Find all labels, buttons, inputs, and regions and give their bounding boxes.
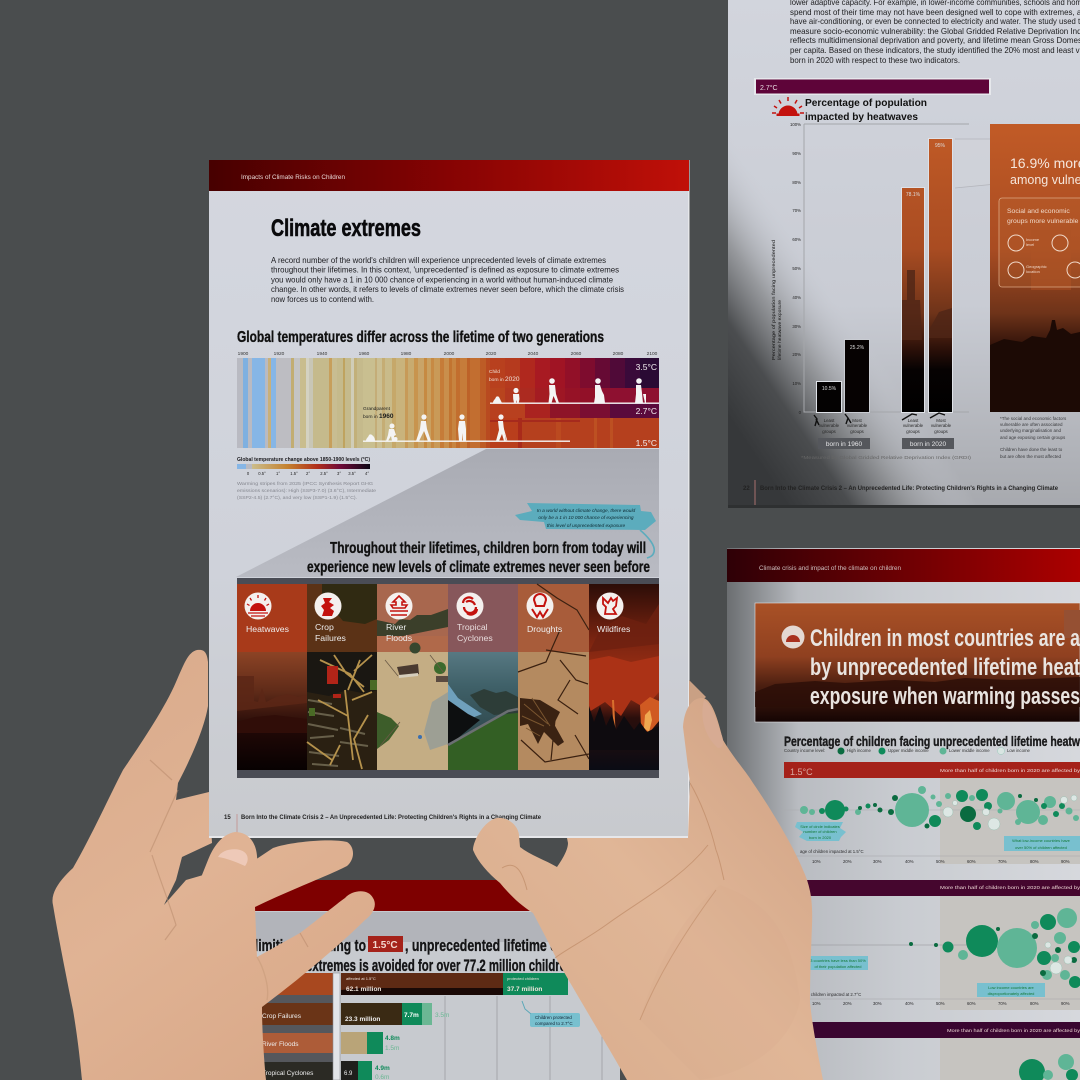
- bar chart: population impacted: groups: [906, 429, 921, 434]
- page footer 15: 15: [224, 815, 231, 821]
- bar chart: children protected: 3.5m: [435, 1012, 449, 1019]
- legend: income level: Country income level:: [784, 748, 825, 753]
- note: bubble annotation: born in 2020: [809, 835, 832, 840]
- legend: temperature scale: 3.5°: [348, 471, 356, 476]
- chart heading: [805, 97, 927, 123]
- chart panel 1.5C: 90%: [1061, 859, 1070, 864]
- grandparent lifeline with silhouettes: [363, 414, 570, 442]
- legend: income level: [784, 748, 1031, 754]
- scenario bar 2.7C: 2.7°C: [760, 84, 778, 92]
- header band: [727, 549, 1080, 582]
- chart panel 2.7C: 60%: [967, 1001, 976, 1006]
- bar chart: population impacted: Percentage of population facing unprecedented: [771, 239, 776, 360]
- bar chart: population impacted: groups: [934, 429, 949, 434]
- headline with 1.5C tag: extremes is avoided for over 77.2 million children: [306, 956, 573, 975]
- note: low income annotation: Low income countries are: [988, 985, 1035, 990]
- legend: temperature scale: Global temperature change above 1850-1900 levels (°C): [237, 457, 370, 463]
- callout text: [1010, 155, 1080, 187]
- year axis: 2060: [571, 351, 582, 357]
- column: crop failures: [307, 584, 377, 770]
- column: droughts: Droughts: [527, 624, 563, 634]
- legend: temperature scale: 0: [247, 471, 250, 476]
- year axis: 2020: [486, 351, 497, 357]
- bar chart: population impacted: groups: [850, 429, 865, 434]
- year axis: [238, 351, 658, 357]
- year axis: 1920: [274, 351, 285, 357]
- legend: temperature scale: 0.5°: [258, 471, 266, 476]
- bar chart: population impacted: 0: [799, 410, 802, 415]
- column: heatwaves: [237, 584, 307, 770]
- chart panel 1.5C: 40%: [905, 859, 914, 864]
- column: crop failures: Crop: [315, 622, 334, 632]
- note: low income annotation: disproportionately affected: [988, 991, 1034, 996]
- bar chart: population impacted: [771, 122, 996, 460]
- bar chart: population impacted: vulnerable: [847, 423, 868, 428]
- year axis: 2040: [528, 351, 539, 357]
- bar chart: children protected: Tropical Cyclones: [262, 1070, 314, 1077]
- bar chart: children protected: affected at 1.5°C: [346, 976, 376, 981]
- note: children protected: compared to 2.7°C: [535, 1021, 573, 1026]
- bar chart: population impacted: 100%: [790, 122, 801, 127]
- panel: right lower report page: [727, 548, 1080, 1080]
- column: wildfires: Wildfires: [597, 624, 631, 634]
- intro text: throughout their lifetimes. In this context, 'unprecedented' is defined as exposure to climate extremes: [271, 266, 619, 274]
- headline: new levels of extremes: [307, 540, 650, 576]
- headline with 1.5C tag: [232, 936, 605, 975]
- headline with 1.5C tag: For limiting warming to: [232, 936, 366, 955]
- callout box: Income: [1026, 237, 1040, 242]
- note: children protected: Children protected: [535, 1015, 572, 1020]
- chart panel 2.7C: More than half of children born in 2020 are affected by: [940, 885, 1080, 890]
- year axis: 1940: [317, 351, 328, 357]
- bar chart: children protected: 6.9: [344, 1071, 353, 1077]
- header band: Impacts of Climate Risks on Children: [241, 175, 345, 181]
- bar chart: children protected: 62.1 million: [346, 986, 381, 993]
- page footer 15: [224, 814, 542, 836]
- bar chart: population impacted: *Measured by Global Gridded Relative Deprivation Index (GRDI): [801, 455, 972, 460]
- bar chart: population impacted: groups: [822, 429, 837, 434]
- header band: [209, 160, 689, 191]
- labels: Child: [489, 369, 500, 375]
- panel: orange statistic panel: [990, 124, 1080, 412]
- page footer 22: 22: [743, 486, 750, 492]
- column: river floods: River: [386, 622, 406, 632]
- bar chart: population impacted: 20%: [792, 352, 801, 357]
- icon: heatwaves: [244, 592, 272, 620]
- callout box: groups more vulnerable: [1007, 218, 1079, 225]
- note: low income annotation: [977, 983, 1045, 997]
- section heading: global temperatures: Global temperatures differ across the lifetime of two generations: [237, 329, 604, 346]
- bubble chart 2.7C: [808, 908, 1080, 997]
- chart panel 3.5C: [784, 1022, 1080, 1080]
- bar chart: children protected: 1.5m: [385, 1045, 399, 1052]
- column: river floods: Floods: [386, 633, 413, 643]
- bar chart: population impacted: vulnerable: [903, 423, 924, 428]
- column: tropical cyclones: [448, 584, 518, 770]
- note: income annotation: over 50% of children affected: [1015, 845, 1067, 850]
- bar chart: population impacted: 80%: [792, 180, 801, 185]
- chart panel 2.7C: 30%: [873, 1001, 882, 1006]
- chart panel 1.5C: 20%: [843, 859, 852, 864]
- chart panel 1.5C: 10%: [812, 859, 821, 864]
- bar chart: population impacted: born in 2020: [910, 441, 946, 448]
- child lifeline with silhouettes: [490, 378, 659, 404]
- chart panel 3.5C: More than half of children born in 2020 are affected by: [947, 1028, 1080, 1033]
- chart panel 2.7C: 40%: [905, 1001, 914, 1006]
- headline with 1.5C tag: , unprecedented lifetime exposure: [405, 936, 605, 955]
- intro text: A record number of the world's children will experience unprecedented levels of climate extremes: [271, 256, 606, 265]
- chart panel 2.7C: 20%: [843, 1001, 852, 1006]
- chart panel 2.7C: [784, 880, 1080, 1010]
- bar chart: children protected: 4.8m: [385, 1035, 400, 1042]
- bar chart: population impacted: 25.2%: [850, 345, 865, 351]
- note: countries annotation: of their population affected: [814, 964, 862, 969]
- bar chart: population impacted: 50%: [792, 266, 801, 271]
- bar chart: population impacted: 70%: [792, 208, 801, 213]
- headline with 1.5C tag: 1.5°C: [372, 940, 398, 951]
- bar chart: population impacted: vulnerable: [931, 423, 952, 428]
- legend: income level: Upper middle income: [888, 748, 929, 753]
- note: teal brush callout: this level of unprecedented exposure: [547, 523, 626, 529]
- warming stripes chart: 3.5°C: [636, 362, 657, 372]
- legend: temperature scale: 2.5°: [320, 471, 328, 476]
- note: bubble annotation: Size of circle indicates: [800, 824, 840, 829]
- bar chart: population impacted: 60%: [792, 237, 801, 242]
- bar chart: children protected: 4.9m: [375, 1065, 390, 1072]
- bar chart: children protected: [250, 973, 602, 1080]
- note: bubble annotation: number of children: [803, 829, 837, 834]
- column: droughts: [518, 584, 589, 770]
- year axis: 1960: [359, 351, 370, 357]
- bar chart: children protected: 7.7m: [404, 1012, 419, 1019]
- bar chart: population impacted: 40%: [792, 295, 801, 300]
- note: countries annotation: [808, 956, 868, 970]
- chart panel 1.5C: 50%: [936, 859, 945, 864]
- panel: bottom report page: [232, 880, 620, 1080]
- side notes: [1000, 416, 1067, 459]
- warming stripes chart: [237, 358, 659, 448]
- note: teal brush callout: In a world without climate change, there would: [537, 508, 636, 514]
- page footer 22: [743, 480, 1059, 505]
- year axis: 2100: [647, 351, 658, 357]
- icon: droughts: [526, 592, 554, 620]
- side notes: *The social and economic factors: [1000, 416, 1067, 421]
- legend: income level: Lower middle income: [949, 748, 990, 753]
- legend: temperature scale: 1°: [276, 471, 280, 476]
- chart panel 1.5C: 70%: [998, 859, 1007, 864]
- legend: income level: High income: [847, 748, 871, 753]
- grey perspective wedge: [236, 449, 659, 577]
- note: income annotation: What low-income countries have: [1012, 838, 1071, 843]
- intro text: change. In other words, it refers to levels of climate extremes never seen before, which the climate crisis: [271, 285, 624, 294]
- chart panel 1.5C: 1.5°C: [790, 767, 813, 777]
- body text: [790, 0, 1080, 65]
- chart heading: impacted by heatwaves: [805, 111, 918, 123]
- source note: (SSP2-4.5) (2.7°C), and very low (SSP1-1.9) (1.5°C).: [237, 495, 357, 501]
- warming stripes chart: Grandparent: [363, 406, 391, 412]
- bar chart: population impacted: 10%: [792, 381, 801, 386]
- side notes: and age exposing certain groups: [1000, 435, 1066, 440]
- intro text: [271, 256, 624, 304]
- legend: income level: Low income: [1007, 748, 1031, 753]
- source note: emissions scenarios): High (SSP3-7.0) (3.6°C), Intermediate: [237, 488, 376, 494]
- note: bubble annotation: [795, 822, 846, 841]
- note: countries annotation: 3 countries have less than 50%: [810, 958, 866, 963]
- legend: temperature scale: 4°: [365, 471, 369, 476]
- chart panel 1.5C: More than half of children born in 2020 are affected by: [940, 768, 1080, 773]
- column: crop failures: Failures: [315, 633, 347, 643]
- warming stripes chart: 2.7°C: [636, 406, 657, 416]
- bar chart: population impacted: lifetime heatwave exposure: [777, 300, 782, 360]
- labels: born in 2020: [489, 376, 520, 383]
- note: income annotation: [1004, 836, 1080, 851]
- labels: [489, 369, 520, 383]
- chart panel 2.7C: 80%: [1030, 1001, 1039, 1006]
- legend: temperature scale: 3°: [337, 471, 341, 476]
- note: teal brush callout: [515, 503, 656, 558]
- scenario bar 2.7C: [754, 78, 991, 95]
- bar chart: population impacted: Most: [936, 418, 947, 423]
- side notes: but are often the most affected: [1000, 454, 1061, 459]
- note: teal brush callout: only be a 1 in 10 000 chance of experiencing: [538, 515, 634, 521]
- bar chart: population impacted: 90%: [792, 151, 801, 156]
- panel: main report page: [209, 160, 690, 838]
- bar chart: children protected: 23.3 million: [345, 1016, 380, 1023]
- source note: Warming stripes from 2025 (IPCC Synthesis Report GHG: [237, 481, 373, 487]
- year axis: 2000: [444, 351, 455, 357]
- callout box: level: [1026, 242, 1034, 247]
- year axis: 1980: [401, 351, 412, 357]
- callout box: Geographic: [1026, 264, 1047, 269]
- chart panel 1.5C: 80%: [1030, 859, 1039, 864]
- callout text: among vulne: [1010, 173, 1080, 187]
- panel: top-right report page: [728, 0, 1080, 508]
- icon: river floods: [386, 592, 412, 620]
- side notes: underlying marginalisation and: [1000, 428, 1062, 433]
- headline: new levels of extremes: experience new levels of climate extremes never seen before: [307, 559, 650, 576]
- chart panel 2.7C: 50%: [936, 1001, 945, 1006]
- panel: climate extremes photo strip: [237, 578, 659, 778]
- icon: heatwave sun: [772, 97, 804, 116]
- bar chart: population impacted: 10.5%: [822, 386, 837, 392]
- legend: temperature scale: 2°: [306, 471, 310, 476]
- headline: new levels of extremes: Throughout their lifetimes, children born from today will: [330, 540, 646, 557]
- callout box: [999, 198, 1080, 287]
- year axis: 1900: [238, 351, 249, 357]
- intro text: you would only have a 1 in 10 000 chance of experiencing in a world without human-induced climate: [271, 276, 613, 284]
- chart panel 2.7C: 90%: [1061, 1001, 1070, 1006]
- icon: right hand: [473, 680, 823, 1080]
- chart panel 1.5C: age of children impacted at 1.5°C: [800, 849, 864, 854]
- icon: left thumb: [186, 832, 258, 928]
- side notes: Children have done the least to: [1000, 447, 1063, 452]
- column: tropical cyclones: Cyclones: [457, 633, 493, 643]
- chart panel 1.5C: 30%: [873, 859, 882, 864]
- column: heatwaves: Heatwaves: [246, 624, 290, 634]
- intro text: now forces us to contend with.: [271, 295, 374, 304]
- bar chart: population impacted: 78.1%: [906, 192, 921, 198]
- year axis: 2080: [613, 351, 624, 357]
- bar chart: population impacted: 95%: [935, 143, 946, 149]
- bar chart: children protected: Crop Failures: [262, 1013, 302, 1020]
- chart panel 1.5C: 60%: [967, 859, 976, 864]
- callout box: location: [1026, 269, 1040, 274]
- legend: temperature scale: 1.5°: [290, 471, 298, 476]
- chart panel 1.5C: [784, 762, 1080, 864]
- bar chart: population impacted: 30%: [792, 324, 801, 329]
- callout box: Social and economic: [1007, 208, 1070, 215]
- bar chart: population impacted: vulnerable: [819, 423, 840, 428]
- page footer 22: Born Into the Climate Crisis 2 – An Unprecedented Life: Protecting Children's Rights in a Changing Climate: [760, 486, 1059, 492]
- bar chart: population impacted: Least: [824, 418, 835, 423]
- bar chart: children protected: River Floods: [262, 1041, 299, 1048]
- note: children protected: [522, 1001, 580, 1027]
- warming stripes chart: 1.5°C: [636, 438, 657, 448]
- chart heading: Percentage of population: [805, 97, 927, 109]
- bar chart: population impacted: born in 1960: [826, 441, 862, 448]
- warming stripes chart: born in 1960: [363, 413, 394, 420]
- bar chart: children protected: protected children: [507, 976, 539, 981]
- banner: children in most countries: [755, 603, 1080, 722]
- chart panel 2.7C: 10%: [812, 1001, 821, 1006]
- chart panel 2.7C: of children impacted at 2.7°C: [806, 992, 861, 997]
- icon: left hand: [52, 650, 375, 1080]
- column: wildfires: [589, 584, 659, 770]
- source note: [237, 481, 376, 501]
- legend: temperature scale: [237, 457, 376, 501]
- title: Climate extremes: [271, 215, 421, 242]
- icon: tropical cyclones: [456, 592, 484, 620]
- header band: Climate crisis and impact of the climate on children: [759, 566, 901, 572]
- icon: wildfires: [596, 592, 624, 620]
- side notes: vulnerable are often associated: [1000, 422, 1063, 427]
- column: river floods: [377, 584, 448, 770]
- bar chart: population impacted: Most: [852, 418, 863, 423]
- chart panel 2.7C: 70%: [998, 1001, 1007, 1006]
- column: tropical cyclones: Tropical: [457, 622, 488, 632]
- bar chart: children protected: 37.7 million: [507, 986, 542, 993]
- page footer 15: Born Into the Climate Crisis 2 – An Unprecedented Life: Protecting Children's Rights in a Changing Climate: [241, 815, 542, 821]
- bubble chart 1.5C: [784, 786, 1080, 851]
- body text: born in 2020 with respect to these two indicators.: [790, 56, 960, 65]
- icon: crop failures: [314, 592, 342, 620]
- bar chart: population impacted: Least: [908, 418, 919, 423]
